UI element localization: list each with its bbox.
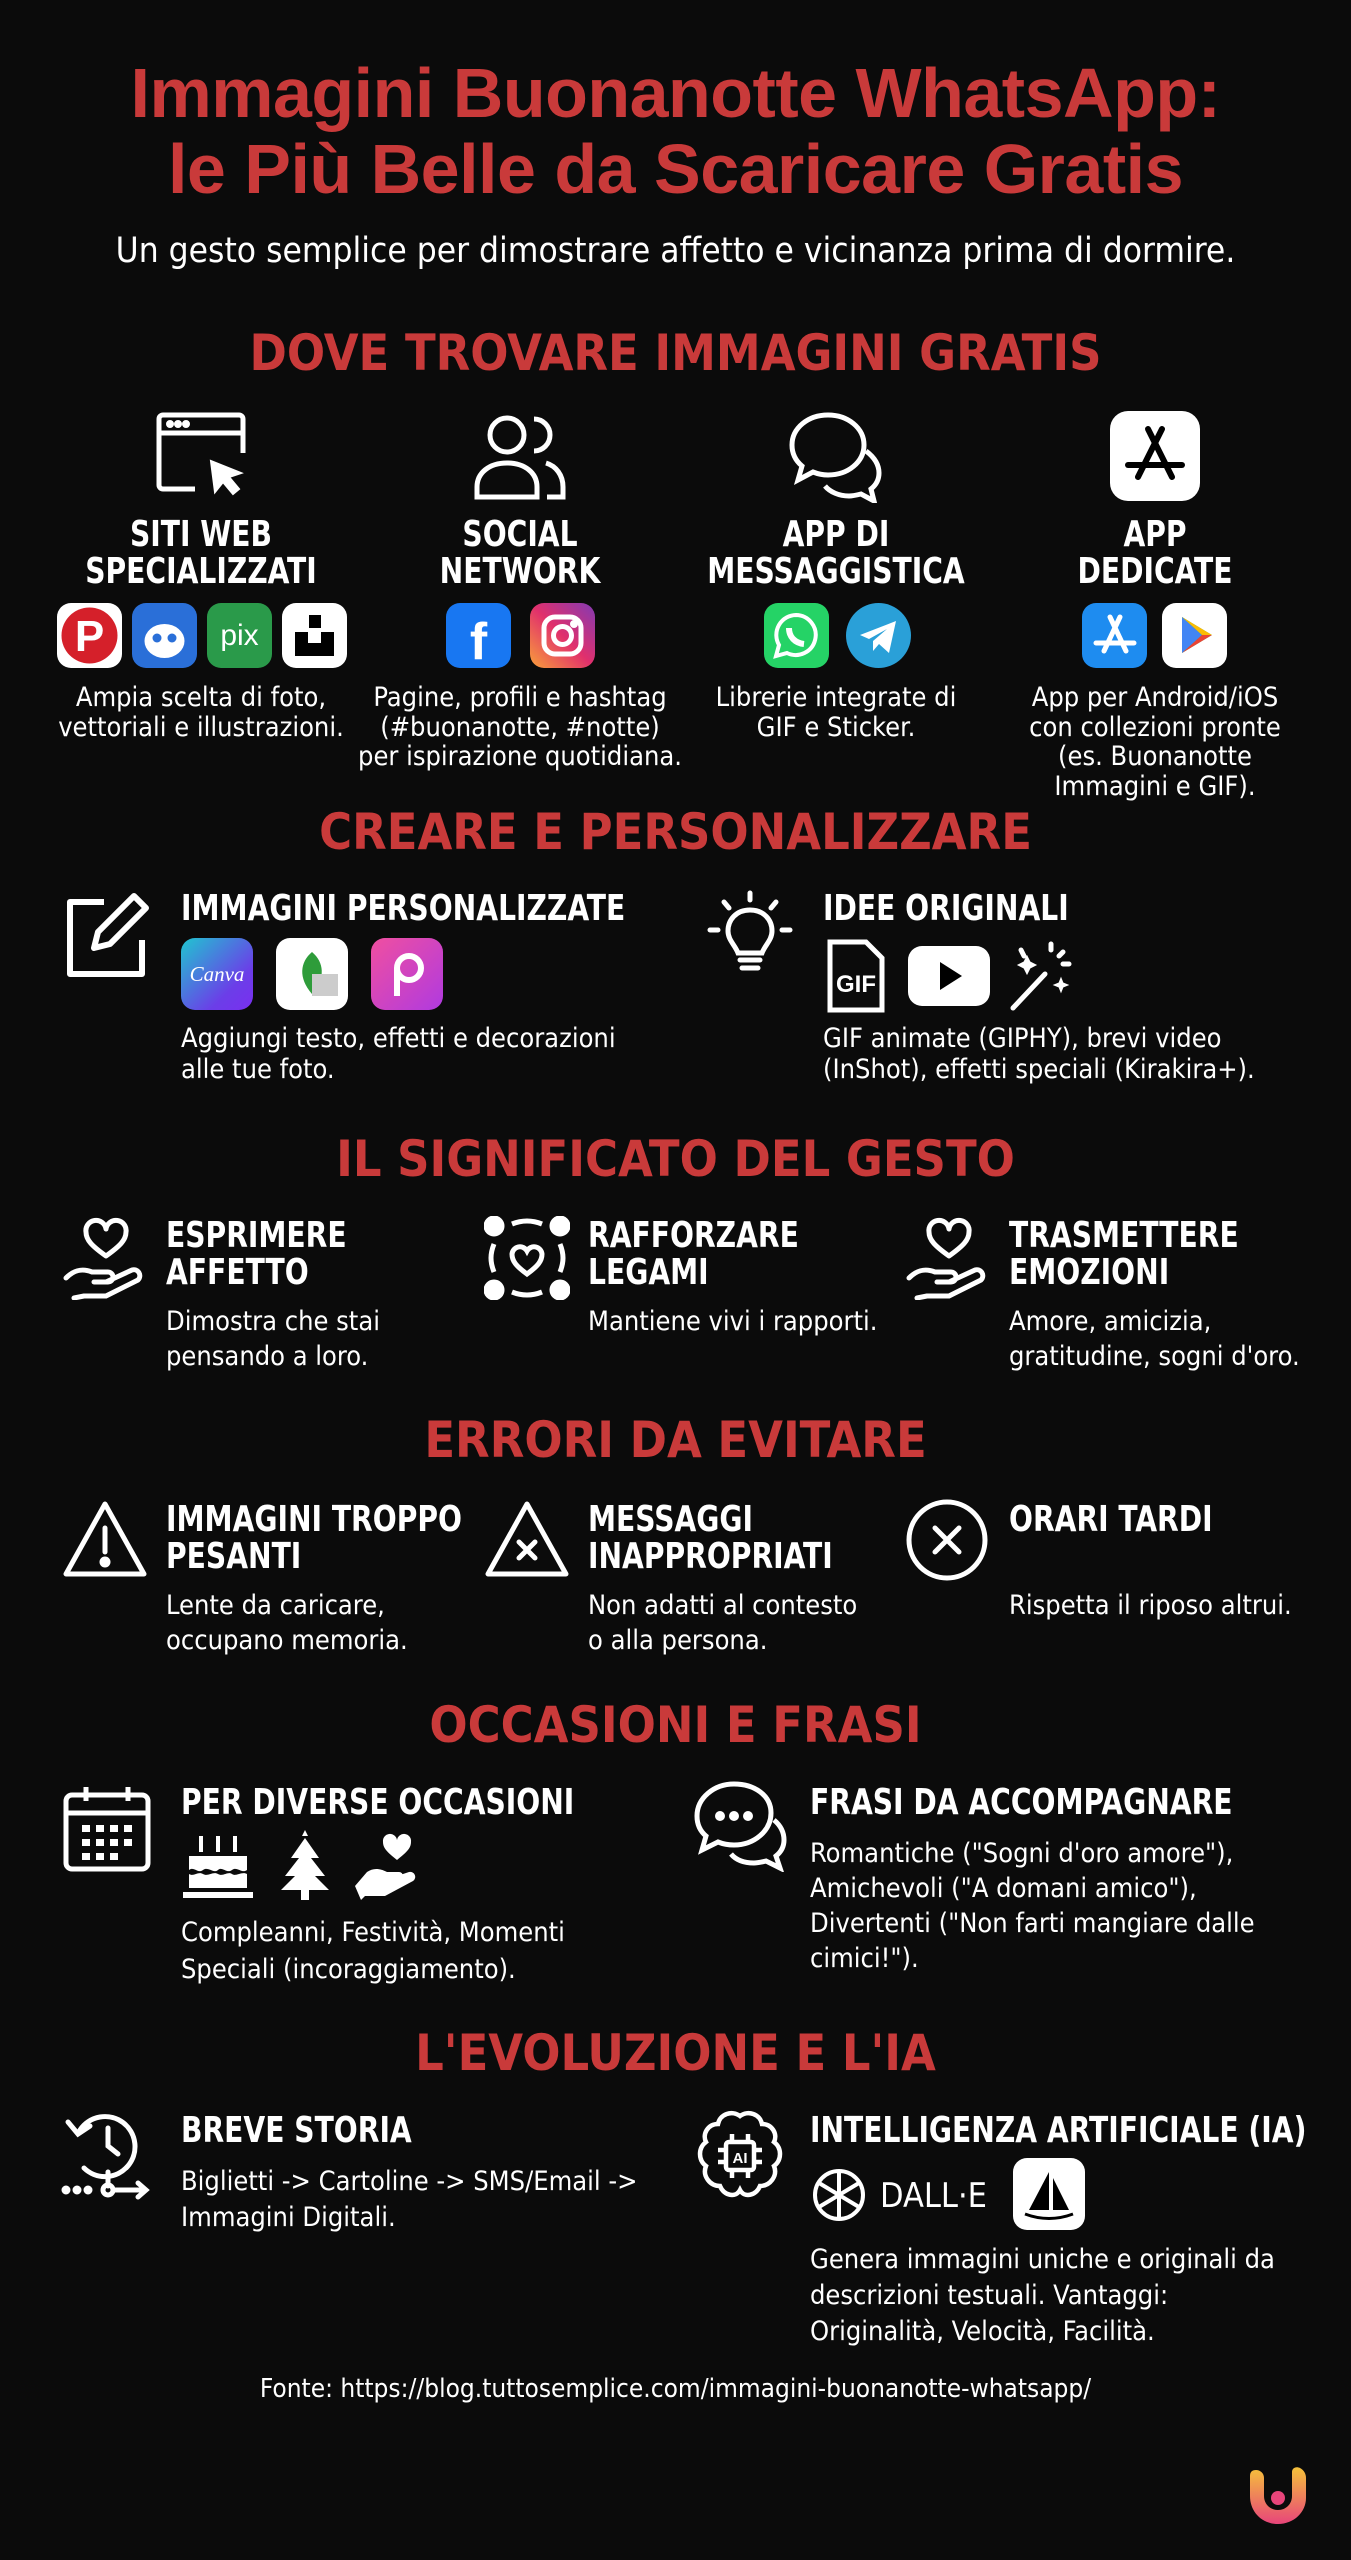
description: o alla persona. [588,1625,767,1656]
label: siti web: SPECIALIZZATI [85,551,317,592]
section heading: dove trovare: DOVE TROVARE IMMAGINI GRATIS [250,324,1101,382]
panel: occasioni [0,1775,1351,2000]
description: idee originali: GIF animate (GIPHY), brevi video [823,1023,1222,1054]
brand icons: siti web: pix [220,619,259,652]
heading: messaggi inappropriati: MESSAGGI [588,1499,753,1540]
description [166,1590,408,1656]
description: personalizzate: Aggiungi testo, effetti e decorazioni [181,1023,616,1054]
heading: per diverse occasioni: PER DIVERSE OCCASIONI [181,1782,574,1823]
icon: chat bubbles [790,412,882,503]
heading: immagini pesanti [166,1499,462,1577]
label: app messaggistica [707,514,965,592]
description: social: per ispirazione quotidiana. [358,741,682,772]
heading: rafforzare legami: RAFFORZARE [588,1215,799,1256]
description: messaging [716,682,956,742]
description: dedicate: con collezioni pronte [1029,712,1281,742]
description: storia: Biglietti -> Cartoline -> SMS/Email -> [181,2166,637,2197]
description: frasi: cimici!"). [810,1943,919,1974]
description [588,1588,857,1658]
section heading: occasioni: OCCASIONI E FRASI [429,1696,922,1754]
app icons: canva snapseed picsart [181,938,443,1010]
ai tools: openai dall-e midjourney: DALL·E [880,2176,987,2216]
heading: rafforzare legami: LEGAMI [588,1252,709,1293]
icon: edit [67,893,149,977]
icon: people [474,416,566,500]
description: IA: Originalità, Velocità, Facilità. [810,2316,1155,2347]
description: social [358,682,682,772]
ai tools: openai dall-e midjourney [810,2158,1090,2232]
description: Mantiene vivi i rapporti. [588,1306,877,1337]
section heading: significato: IL SIGNIFICATO DEL GESTO [336,1130,1015,1188]
icon: calendar [62,1783,152,1873]
description: gratitudine, sogni d'oro. [1009,1341,1300,1372]
heading: trasmettere emozioni: EMOZIONI [1009,1252,1169,1293]
description: dedicate: App per Android/iOS [1032,682,1278,713]
subtitle: Un gesto semplice per dimostrare affetto e vicinanza prima di dormire. [116,231,1235,271]
heading: immagini personalizzate: IMMAGINI PERSONALIZZATE [181,888,625,929]
description: dedicate: Immagini e GIF). [1054,770,1256,802]
label: app dedicate [1077,514,1233,592]
icon: hand heart [64,1218,142,1300]
description: occasioni [181,1914,565,1988]
icon: history [60,2108,154,2204]
description: dedicate: (es. Buonanotte [1058,741,1252,772]
icons: gif youtube magic [828,940,1072,1012]
icon: chat dots [692,1780,790,1872]
icon: hand heart 2 [906,1218,986,1300]
section heading: evoluzione: L'EVOLUZIONE E L'IA [415,2024,936,2082]
icons: cake tree hand [181,1830,451,1902]
icon: heart network [484,1216,570,1300]
description: personalizzate: alle tue foto. [181,1054,335,1085]
icon: AI brain: AI [732,2150,748,2167]
icon: warning x [486,1502,568,1576]
heading: breve storia: BREVE STORIA [181,2110,412,2151]
panel: significato [64,1215,1300,1372]
label: app dedicate: APP [1123,514,1187,555]
heading: trasmettere emozioni [1009,1215,1239,1293]
heading: frasi da accompagnare: FRASI DA ACCOMPAGNARE [810,1782,1233,1823]
icon: AI brain [692,2108,788,2204]
description: Rispetta il riposo altrui. [1009,1590,1292,1621]
description: frasi: Amichevoli ("A domani amico"), [810,1873,1197,1904]
panel: dove trovare [57,411,1281,802]
brand icons: stores [1082,603,1227,668]
description: siti web: Ampia scelta di foto, [76,682,326,713]
description: occasioni: Compleanni, Festività, Momenti [181,1917,565,1948]
label: siti web [85,514,317,592]
label: siti web: SITI WEB [130,514,272,555]
heading: trasmettere emozioni: TRASMETTERE [1009,1215,1239,1256]
label: social network: NETWORK [440,551,600,592]
label: social network: SOCIAL [462,514,578,555]
heading: idee originali: IDEE ORIGINALI [823,888,1069,929]
label: social network [440,514,602,592]
heading: intelligenza artificiale: INTELLIGENZA ARTIFICIALE (IA) [810,2110,1306,2151]
icon: app store [1110,411,1200,501]
icon: browser cursor [156,412,246,496]
heading: esprimere affetto: AFFETTO [166,1252,309,1293]
description: IA: Genera immagini uniche e originali da [810,2244,1275,2275]
title: Immagini Buonanotte WhatsApp: [131,54,1220,132]
title [131,54,1220,208]
title: le Più Belle da Scaricare Gratis [168,130,1183,208]
panel: errori [64,1499,1292,1656]
description: idee originali: (InShot), effetti speciali (Kirakira+). [823,1054,1255,1085]
label: app messaggistica: MESSAGGISTICA [707,551,965,592]
heading: immagini pesanti: IMMAGINI TROPPO [166,1499,462,1540]
icon: circle x [905,1498,989,1582]
description: IA [810,2242,1275,2350]
description [1009,1306,1300,1372]
section heading: errori: ERRORI DA EVITARE [424,1411,927,1469]
icons: gif youtube magic: GIF [836,971,876,998]
heading: messaggi inappropriati: INAPPROPRIATI [588,1536,833,1577]
icon: warning [64,1502,146,1576]
description: dedicate [1029,682,1281,802]
heading: esprimere affetto: ESPRIMERE [166,1215,347,1256]
brand icons: messaging [764,603,911,668]
heading: esprimere affetto [166,1215,347,1293]
panel: creare [67,888,1255,1085]
brand icons: social [446,603,595,668]
panel: evoluzione [0,2100,1351,2360]
heading: orari tardi: ORARI TARDI [1009,1499,1213,1540]
description: storia [181,2164,637,2236]
brand icons: siti web: P [75,612,104,661]
icon: light bulb [708,890,792,970]
logo [1250,2464,1312,2524]
heading: rafforzare legami [588,1215,799,1293]
app icons: canva snapseed picsart: Canva [190,962,244,986]
heading: messaggi inappropriati [588,1499,833,1577]
description: Lente da caricare, [166,1590,385,1621]
description: frasi [810,1836,1255,1976]
brand icons: siti web [57,603,347,668]
description: occupano memoria. [166,1625,408,1656]
description: social: (#buonanotte, #notte) [380,712,660,742]
description: messaging: Librerie integrate di [716,682,956,713]
description: personalizzate [181,1023,616,1085]
label: app dedicate: DEDICATE [1077,551,1233,592]
description: social: Pagine, profili e hashtag [373,682,667,713]
heading: immagini pesanti: PESANTI [166,1536,301,1577]
description: occasioni: Speciali (incoraggiamento). [181,1954,516,1985]
description [166,1306,380,1372]
section heading: creare: CREARE E PERSONALIZZARE [319,803,1032,861]
description: messaging: GIF e Sticker. [757,712,915,742]
description: idee originali [823,1023,1255,1085]
description: siti web: vettoriali e illustrazioni. [58,712,344,742]
description: pensando a loro. [166,1341,368,1372]
label: app messaggistica: APP DI [783,514,889,555]
description: frasi: Romantiche ("Sogni d'oro amore"), [810,1838,1233,1869]
description: Non adatti al contesto [588,1590,857,1621]
description: storia: Immagini Digitali. [181,2202,396,2233]
source footer: Fonte: https://blog.tuttosemplice.com/immagini-buonanotte-whatsapp/ [260,2374,1091,2404]
description: Dimostra che stai [166,1306,380,1337]
description: siti web [58,682,344,742]
description: Amore, amicizia, [1009,1306,1211,1337]
description: frasi: Divertenti ("Non farti mangiare dalle [810,1908,1255,1939]
description: IA: descrizioni testuali. Vantaggi: [810,2280,1168,2311]
